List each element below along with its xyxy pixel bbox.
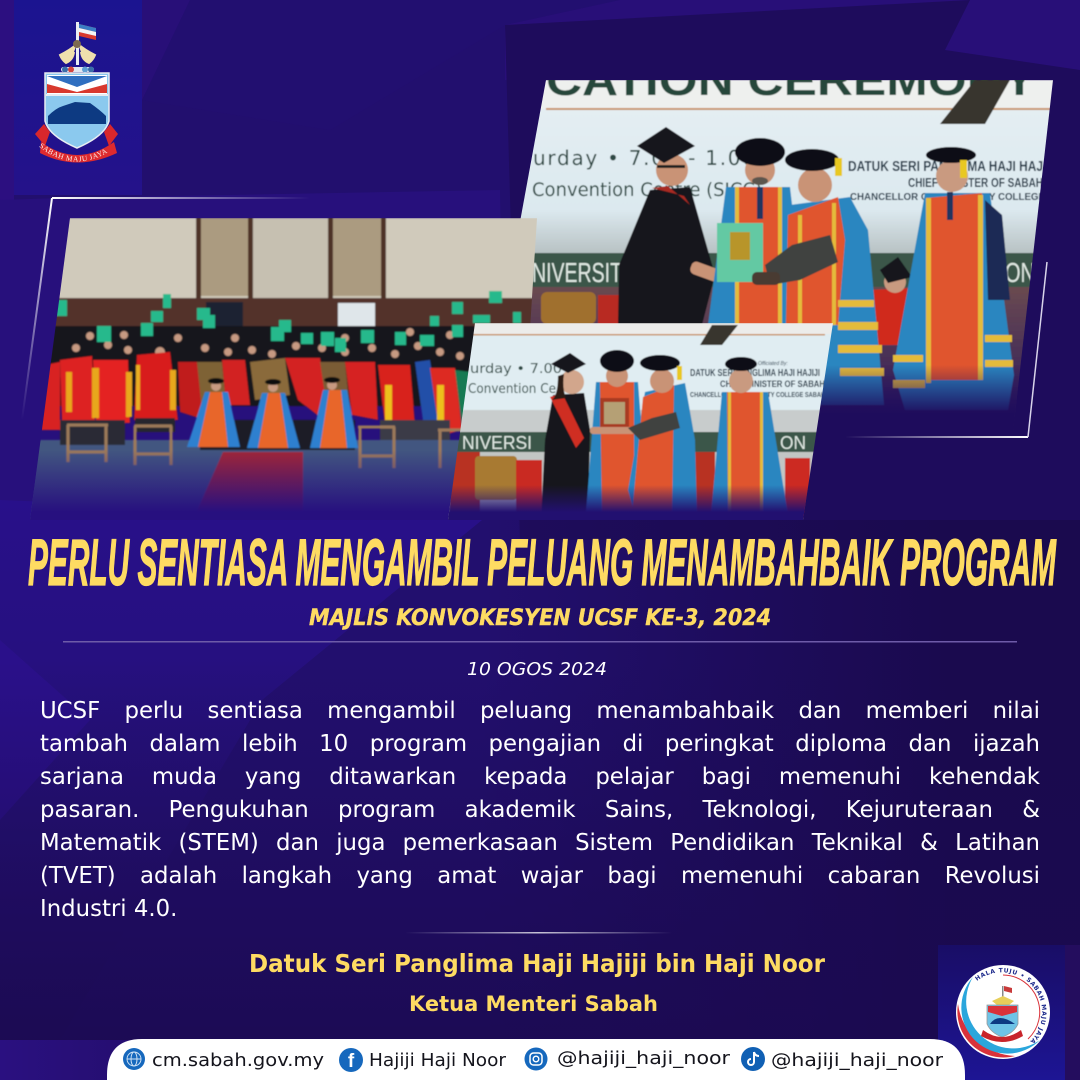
photo frame lines <box>21 197 1047 438</box>
round logo: Hala Tuju <box>956 965 1050 1059</box>
tables <box>67 425 465 468</box>
body paragraph: Matematik (STEM) dan juga pemerkasaan Sistem Pendidikan Teknikal & Latihan <box>40 830 1040 856</box>
photo: large presentation: ON <box>1005 257 1035 288</box>
background seated <box>530 286 1030 400</box>
photo: second presentation: DATUK SERI PANGLIMA HAJI HAJIJI <box>690 368 820 379</box>
body paragraph: UCSF perlu sentiasa mengambil peluang menambahbaik dan memberi nilai <box>40 698 1040 724</box>
graduate 1 <box>618 187 715 325</box>
dignitary 3 <box>782 197 884 405</box>
photo: large presentation <box>520 80 1053 410</box>
body paragraph: pasaran. Pengukuhan program akademik Sains, Teknologi, Kejuruteraan & <box>40 797 1040 823</box>
stage text: urday • 7.00 <box>470 362 562 377</box>
body paragraph <box>40 698 1040 922</box>
icon: instagram <box>524 1048 548 1070</box>
icon: facebook <box>339 1048 363 1072</box>
wreath <box>61 67 94 72</box>
motto ribbon <box>40 142 117 162</box>
photo: large presentation: CHIEF MINISTER OF SABAH <box>908 175 1043 190</box>
speaker role: Ketua Menteri Sabah <box>409 992 658 1016</box>
dignitary center <box>628 383 697 515</box>
instagram handle: @hajiji_haji_noor <box>557 1048 731 1069</box>
photo: large presentation: CATION CEREMONY <box>546 56 1036 105</box>
photo: second presentation: Convention Ce <box>468 382 556 397</box>
speaker name: Datuk Seri Panglima Haji Hajiji bin Haji Noor <box>249 949 826 978</box>
tiktok handle: @hajiji_haji_noor <box>771 1050 944 1071</box>
stage text: urday • 7.00 - 1.00 <box>533 146 755 170</box>
coat of arms of Sabah: SABAH MAJU JAYA <box>39 144 108 162</box>
dignitary center left <box>586 382 642 510</box>
photo: large presentation: Convention Centre (SICC) <box>532 179 762 201</box>
icon: tiktok <box>741 1047 765 1071</box>
certificate <box>717 223 763 282</box>
coat of arms of Sabah <box>35 22 118 162</box>
icon: facebook: f <box>348 1051 355 1072</box>
raised green cards <box>56 291 521 352</box>
graduate girl <box>541 393 590 520</box>
divider <box>63 641 1017 642</box>
dignitary right <box>711 392 788 515</box>
floor <box>20 440 540 520</box>
plaque <box>600 398 629 428</box>
dignitary 4 <box>893 193 1014 410</box>
shield <box>45 73 109 148</box>
photo: large presentation: CHANCELLOR OF UNIVERSITY COLLEGE <box>850 192 1045 203</box>
round logo: Hala Tuju: HALA TUJU • SABAH MAJU JAYA <box>974 968 1047 1043</box>
photo: second presentation: CHIEF MINISTER OF SABAH <box>720 379 825 389</box>
body paragraph: tambah dalam lebih 10 program pengajian di peringkat diploma dan ijazah <box>40 731 1040 757</box>
body paragraph: sarjana muda yang ditawarkan kepada pelajar bagi memenuhi kehendak <box>40 764 1040 790</box>
bottom fade <box>31 454 456 512</box>
body paragraph: Industri 4.0. <box>40 896 177 922</box>
facebook name: Hajiji Haji Noor <box>369 1050 507 1071</box>
signature divider <box>405 932 672 934</box>
crowd caps <box>40 326 475 406</box>
photo: second presentation: Officiated By: <box>758 361 788 367</box>
website: cm.sabah.gov.my <box>152 1050 324 1071</box>
date: 10 OGOS 2024 <box>467 659 607 680</box>
icon: website globe <box>123 1048 145 1070</box>
hall wall <box>20 218 540 300</box>
flag and pole <box>76 22 79 65</box>
photo: second presentation: CHANCELLOR OF UNIVERSITY COLLEGE SABAH <box>690 392 825 399</box>
subtitle: MAJLIS KONVOKESYEN UCSF KE-3, 2024 <box>309 606 771 631</box>
photo: graduates group <box>0 218 560 520</box>
crest arms <box>60 44 95 63</box>
seated dignitaries <box>200 420 355 450</box>
stage banner heading <box>541 82 1052 108</box>
body paragraph: (TVET) adalah langkah yang amat wajar bagi memenuhi cabaran Revolusi <box>40 863 1040 889</box>
mini crest <box>1002 986 1004 1000</box>
stage green banner <box>480 253 1060 287</box>
faces row <box>72 328 464 360</box>
photo: large presentation: NIVERSIT <box>532 257 622 288</box>
lower fade <box>819 367 1019 415</box>
standing gowns <box>40 362 60 430</box>
footer contact pill <box>107 1039 965 1080</box>
photo: second presentation: NIVERSI <box>462 433 532 453</box>
dignitary 2 <box>708 186 792 324</box>
photo: second presentation: ON <box>780 433 806 453</box>
photo: second presentation <box>440 323 840 520</box>
